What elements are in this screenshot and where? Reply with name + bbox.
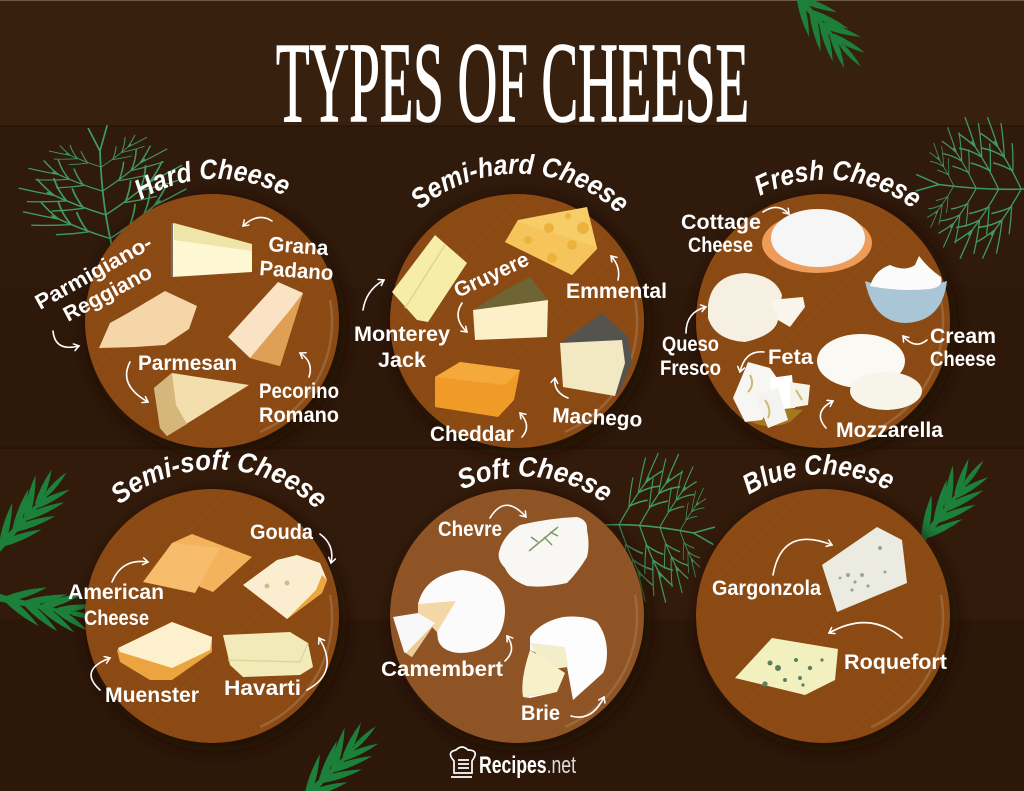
label: pecorino romano: Pecorino <box>259 380 339 403</box>
cheese: roquefort <box>735 638 838 695</box>
label: chevre: Chevre <box>438 518 502 541</box>
label: cheddar: Cheddar <box>430 423 514 446</box>
cheese: pecorino romano <box>228 282 303 366</box>
label: monterey jack <box>354 323 450 372</box>
icon: chef hat <box>450 747 475 777</box>
label: roquefort: Roquefort <box>844 651 947 674</box>
cheese: camembert <box>393 570 505 657</box>
sprig: left lower rosemary <box>0 572 106 643</box>
arrows <box>53 217 310 402</box>
cheese: cheddar <box>435 362 520 417</box>
cheese: brie <box>522 617 607 700</box>
label: american cheese: Cheese <box>84 607 149 630</box>
label: cottage cheese: Cottage <box>681 211 761 234</box>
label: monterey jack: Monterey <box>354 323 450 346</box>
label: mozzarella: Mozzarella <box>836 419 943 442</box>
label: gouda: Gouda <box>250 521 313 544</box>
sprig: bottom rosemary <box>280 709 393 791</box>
label: feta: Feta <box>768 346 813 369</box>
heading: Semi-soft Cheese <box>112 449 324 507</box>
label: muenster: Muenster <box>105 684 199 707</box>
sprig: left upper rosemary <box>0 456 84 571</box>
label: brie: Brie <box>521 702 560 725</box>
cheese: american cheese <box>143 534 252 593</box>
cheese: grana padano <box>172 223 252 277</box>
label: pecorino romano: Romano <box>259 404 339 427</box>
panel: semi-soft cheese <box>68 449 347 748</box>
label: parmigiano-reggiano: Reggiano <box>60 261 156 326</box>
cheese: machego <box>560 313 632 396</box>
heading: Hard Cheese <box>135 158 289 200</box>
label: queso fresco <box>660 333 721 380</box>
arrows <box>686 207 927 428</box>
label: cottage cheese <box>681 211 761 257</box>
heading: Fresh Cheese <box>755 160 920 206</box>
label: grana padano: Grana <box>268 233 329 260</box>
cheese: feta <box>733 362 810 428</box>
board <box>85 489 346 751</box>
panel: hard cheese <box>31 158 346 457</box>
heading: Soft Cheese <box>458 457 610 500</box>
cheese: gruyere <box>473 277 548 340</box>
label: camembert: Camembert <box>381 658 503 681</box>
label: american cheese: American <box>68 581 164 604</box>
label: havarti: Havarti <box>224 677 301 700</box>
heading: Semi-hard Cheese <box>412 154 626 211</box>
panel: fresh cheese <box>660 160 996 457</box>
cheese: cream cheese <box>865 256 947 323</box>
sprig: fresh cheese dill <box>914 115 1024 261</box>
cheese: havarti <box>223 632 313 677</box>
sprig: hard cheese dill <box>12 116 194 270</box>
label: american cheese <box>68 581 164 630</box>
panel: blue cheese <box>695 454 958 748</box>
cheese: monterey jack <box>392 235 467 322</box>
cheese: emmental <box>505 207 597 275</box>
board <box>696 489 957 751</box>
label: queso fresco: Queso <box>662 333 719 356</box>
heading: Blue Cheese <box>743 454 893 494</box>
panel: semi-hard cheese <box>354 154 667 457</box>
label: grana padano: Padano <box>259 257 334 285</box>
label: parmesan: Parmesan <box>138 352 237 375</box>
cheese: parmesan <box>154 373 249 436</box>
arrows <box>91 534 332 690</box>
cheese: gouda <box>243 555 327 619</box>
label: cream cheese: Cheese <box>930 348 996 371</box>
sprig: soft cheese dill <box>596 448 720 607</box>
logo: Recipes.net <box>450 747 576 779</box>
board <box>390 489 651 751</box>
label: monterey jack: Jack <box>378 349 426 372</box>
label: emmental: Emmental <box>566 280 667 303</box>
label: grana padano <box>259 233 334 285</box>
label: machego: Machego <box>552 404 643 432</box>
label: parmigiano-reggiano: Parmigiano- <box>31 231 156 314</box>
label: gargonzola: Gargonzola <box>712 577 821 600</box>
heading <box>458 457 610 500</box>
cheese: parmigiano-reggiano <box>99 291 197 348</box>
arrows <box>490 505 604 717</box>
arrows <box>773 539 902 638</box>
cheese: cottage cheese <box>762 209 872 273</box>
label: cream cheese <box>930 325 996 371</box>
label: cottage cheese: Cheese <box>688 234 753 257</box>
cheese: mozzarella <box>817 334 922 410</box>
sprig: top rosemary <box>773 0 878 82</box>
cheese: muenster <box>117 622 212 680</box>
cheese: chevre <box>499 517 588 587</box>
board <box>696 194 957 456</box>
wordmark: Recipes.net <box>479 752 576 779</box>
board <box>85 194 346 456</box>
sprig: blue cheese rosemary <box>896 445 1003 563</box>
arrows <box>363 256 619 437</box>
panel: soft cheese <box>381 457 654 748</box>
cheese: gorgonzola <box>822 527 907 612</box>
label: gruyere: Gruyere <box>450 248 533 303</box>
cheese: queso fresco <box>708 273 805 342</box>
label: pecorino romano <box>259 380 339 427</box>
board <box>390 194 651 456</box>
label: queso fresco: Fresco <box>660 357 721 380</box>
label: cream cheese: Cream <box>930 325 996 348</box>
